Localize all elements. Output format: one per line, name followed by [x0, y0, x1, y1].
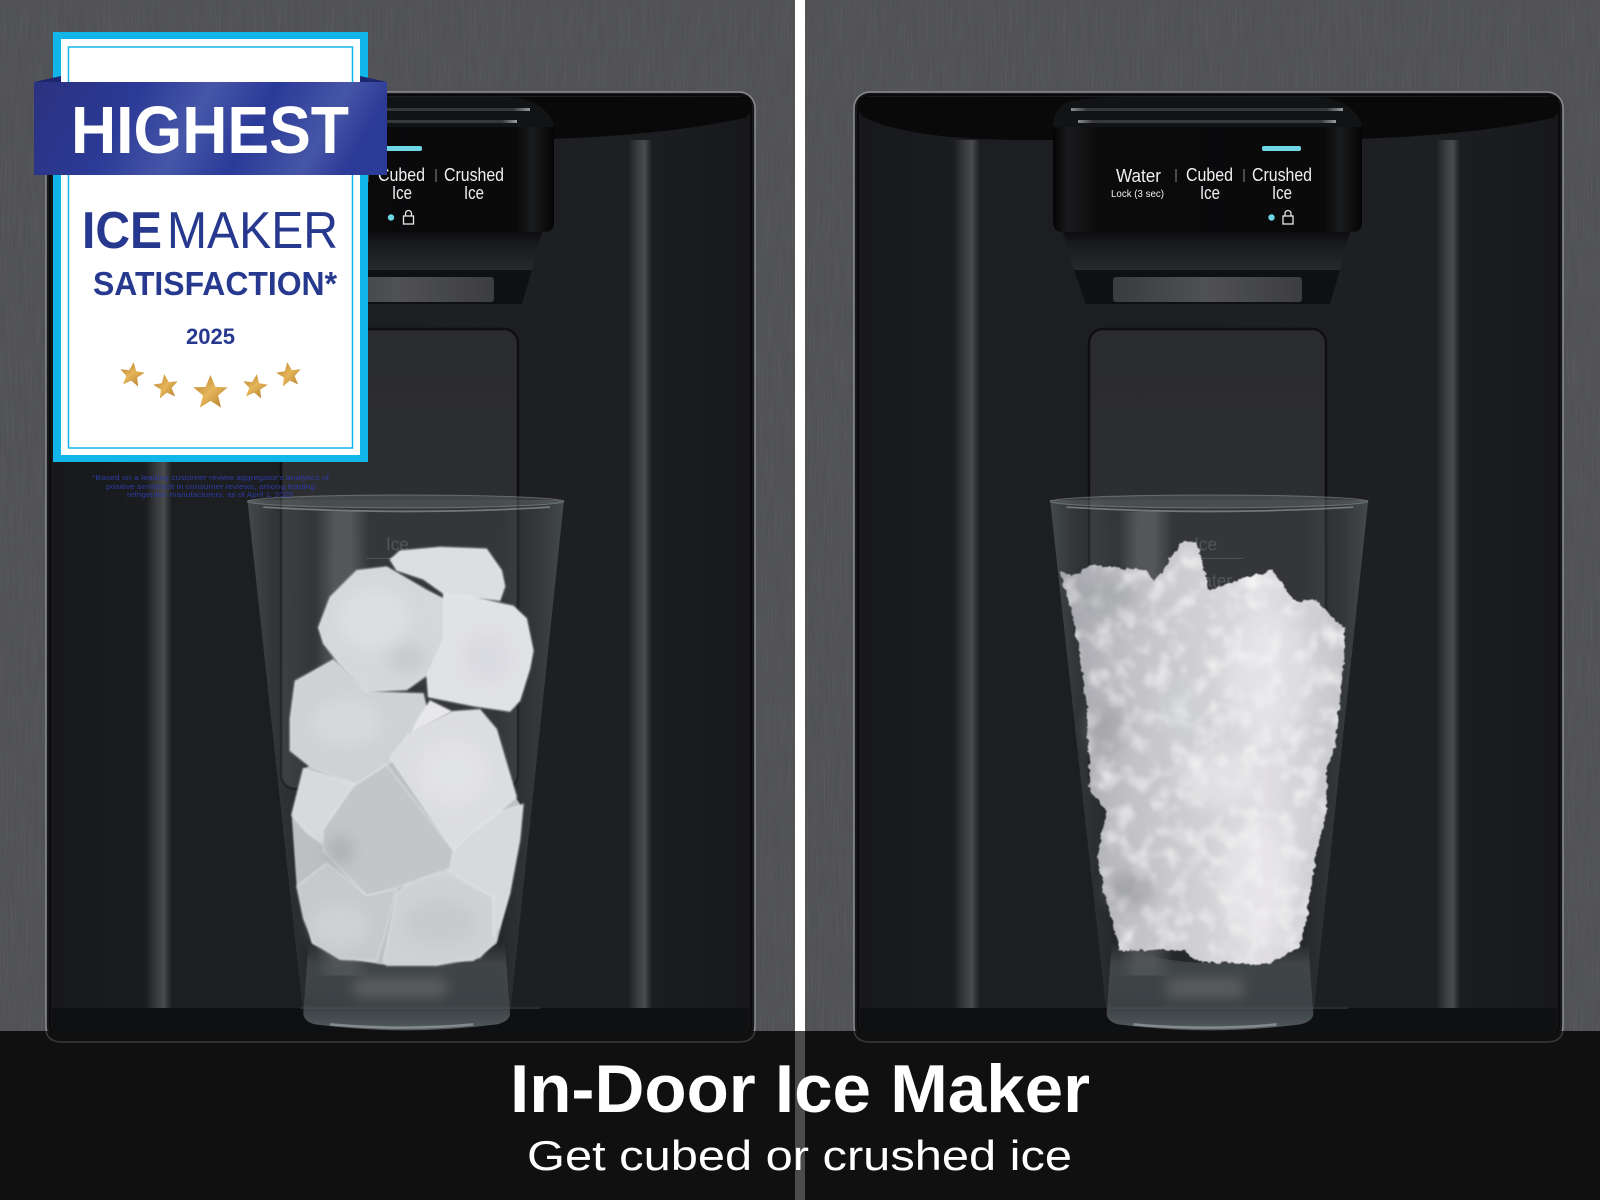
- display labels: Crushed: [1252, 165, 1312, 185]
- footnote: positive sentiment in consumer reviews, among leading: [106, 482, 315, 491]
- ribbon: [34, 76, 387, 175]
- footnote: refrigerator manufacturers, as of April 1, 2025: [127, 490, 293, 499]
- measuring marks on plate: Water: [1187, 571, 1232, 591]
- selector indicator bar: [358, 146, 422, 151]
- display labels: [303, 165, 504, 203]
- satisfaction heading: SATISFACTION*: [93, 265, 337, 302]
- display labels: Water: [1116, 166, 1161, 186]
- display labels: Cubed: [1186, 165, 1233, 185]
- ice maker heading: ICE: [82, 202, 162, 260]
- dispenser head: [245, 97, 554, 304]
- status dot and lock icon: [1268, 211, 1293, 224]
- status dot and lock icon: [388, 211, 414, 224]
- display labels: [1111, 165, 1312, 203]
- dispenser head: [1053, 97, 1362, 304]
- crushed ice: [1060, 540, 1345, 965]
- bottom caption band: [0, 1031, 1600, 1200]
- water chute plate: [281, 329, 518, 789]
- glass with cubed ice: [247, 495, 564, 1030]
- year: 2025: [186, 324, 235, 349]
- subtitle: Get cubed or crushed ice: [527, 1132, 1072, 1179]
- panel: crushed ice dispenser recess: [854, 92, 1563, 1042]
- display labels: Ice: [464, 183, 484, 203]
- display labels: Crushed: [444, 165, 504, 185]
- ribbon: HIGHEST: [71, 93, 349, 168]
- display labels: Lock (3 sec): [303, 189, 356, 200]
- display labels: Cubed: [378, 165, 425, 185]
- measuring marks on plate: Ice: [1194, 534, 1217, 555]
- display labels: Ice: [392, 183, 412, 203]
- measuring marks on plate: Ice: [386, 534, 409, 555]
- selector indicator bar: [1262, 146, 1301, 151]
- award badge: [34, 32, 387, 499]
- panel: cubed ice dispenser recess: [46, 92, 755, 1042]
- measuring marks on plate: [367, 534, 417, 559]
- badge frame: [53, 32, 368, 462]
- footnote: *Based on a leading customer review aggregator's analytics of: [92, 473, 330, 482]
- five gold stars: [118, 360, 303, 408]
- water chute plate: [1089, 329, 1326, 789]
- ice cubes: [290, 547, 533, 966]
- ice maker heading: [82, 202, 338, 260]
- display labels: Water: [308, 166, 353, 186]
- display labels: Ice: [1200, 183, 1220, 203]
- display labels: Ice: [1272, 183, 1292, 203]
- footnote: [92, 473, 330, 499]
- glass with crushed ice: [1050, 495, 1368, 1030]
- title: In-Door Ice Maker: [510, 1051, 1090, 1127]
- measuring marks on plate: [1180, 534, 1243, 591]
- display labels: Lock (3 sec): [1111, 189, 1164, 200]
- ice maker heading: MAKER: [167, 202, 338, 260]
- divider between panels: [795, 0, 805, 1031]
